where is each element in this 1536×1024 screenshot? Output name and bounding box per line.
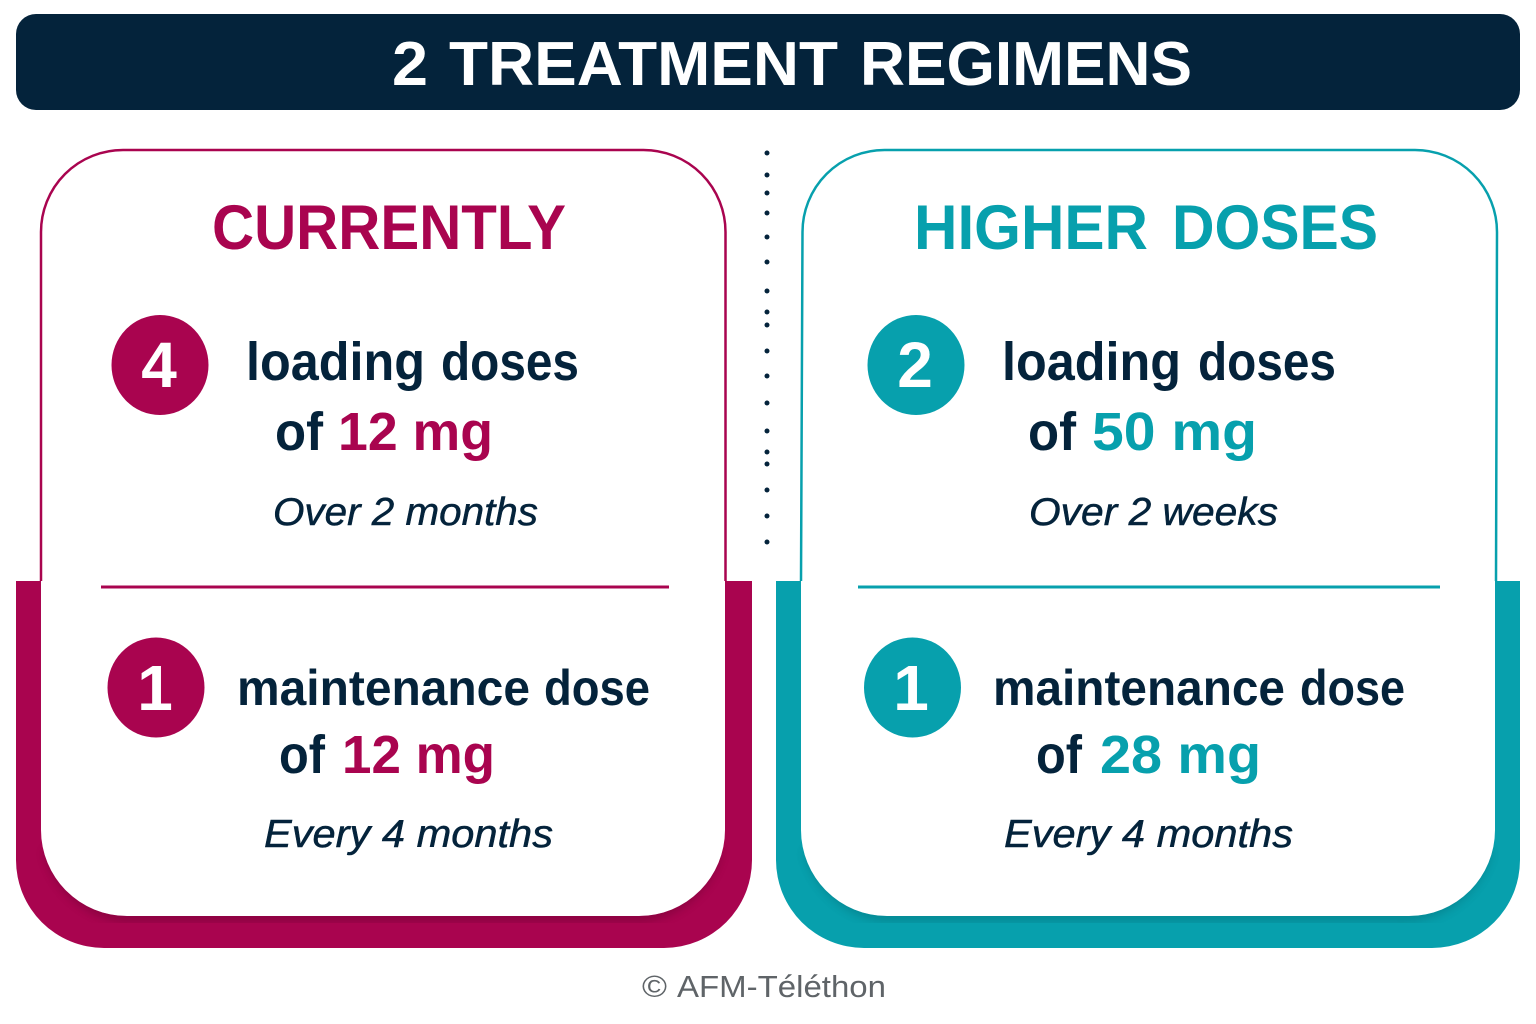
panel: higher doses	[776, 150, 1520, 948]
text: maintenance dose of 28 mg: of	[1036, 725, 1083, 785]
credit: ©	[642, 969, 667, 1004]
panel: currently	[16, 150, 752, 948]
badge: 2	[868, 315, 964, 415]
heading: higher doses: HIGHER	[914, 193, 1148, 263]
text: loading doses of 12 mg	[246, 332, 579, 462]
badge: 1: 1	[893, 652, 929, 724]
text: maintenance dose of 28 mg	[993, 660, 1405, 785]
dotted divider	[764, 150, 770, 544]
badge: 4: 4	[141, 329, 177, 401]
text: maintenance dose of 28 mg: 28 mg	[1100, 725, 1261, 785]
title banner: REGIMENS	[860, 30, 1192, 99]
title banner: TREATMENT	[449, 30, 838, 99]
badge: 2: 2	[897, 329, 933, 401]
text: loading doses of 50 mg: loading	[1002, 332, 1181, 392]
text: loading doses of 50 mg: of	[1028, 402, 1077, 462]
badge: 1	[108, 638, 204, 738]
divider	[858, 586, 1440, 588]
badge: 1: 1	[137, 652, 173, 724]
text: maintenance dose of 28 mg: maintenance	[993, 660, 1285, 716]
text: maintenance dose of 28 mg: dose	[1300, 660, 1405, 716]
text: maintenance dose of 12 mg: of	[279, 725, 326, 785]
panel frame: currently	[16, 150, 752, 948]
text: loading doses of 50 mg: 50 mg	[1092, 402, 1257, 462]
heading: currently: CURRENTLY	[212, 193, 566, 263]
badge: 1	[864, 638, 961, 738]
text: loading doses of 50 mg: doses	[1198, 332, 1336, 392]
text: loading doses of 50 mg	[1002, 332, 1336, 462]
title banner: 2	[392, 30, 428, 99]
note: over 2 weeks: Over 2 weeks	[1029, 491, 1278, 534]
note: over 2 months: Over 2 months	[273, 491, 538, 534]
panel frame: higher doses	[776, 150, 1520, 948]
heading: higher doses: DOSES	[1172, 193, 1378, 263]
title banner	[16, 14, 1520, 110]
text: loading doses of 12 mg: loading	[246, 332, 425, 392]
text: maintenance dose of 12 mg	[237, 660, 650, 785]
text: loading doses of 12 mg: doses	[441, 332, 579, 392]
text: loading doses of 12 mg: of	[275, 402, 324, 462]
heading: higher doses	[914, 193, 1378, 263]
text: loading doses of 12 mg: 12 mg	[338, 402, 493, 462]
divider	[101, 586, 669, 588]
note: every 4 months: Every 4 months	[264, 813, 553, 856]
credit: AFM-Téléthon	[677, 969, 886, 1004]
text: maintenance dose of 12 mg: maintenance	[237, 660, 530, 716]
text: maintenance dose of 12 mg: 12 mg	[342, 725, 495, 785]
text: maintenance dose of 12 mg: dose	[544, 660, 650, 716]
note: every 4 months: Every 4 months	[1004, 813, 1293, 856]
badge: 4	[112, 315, 208, 415]
